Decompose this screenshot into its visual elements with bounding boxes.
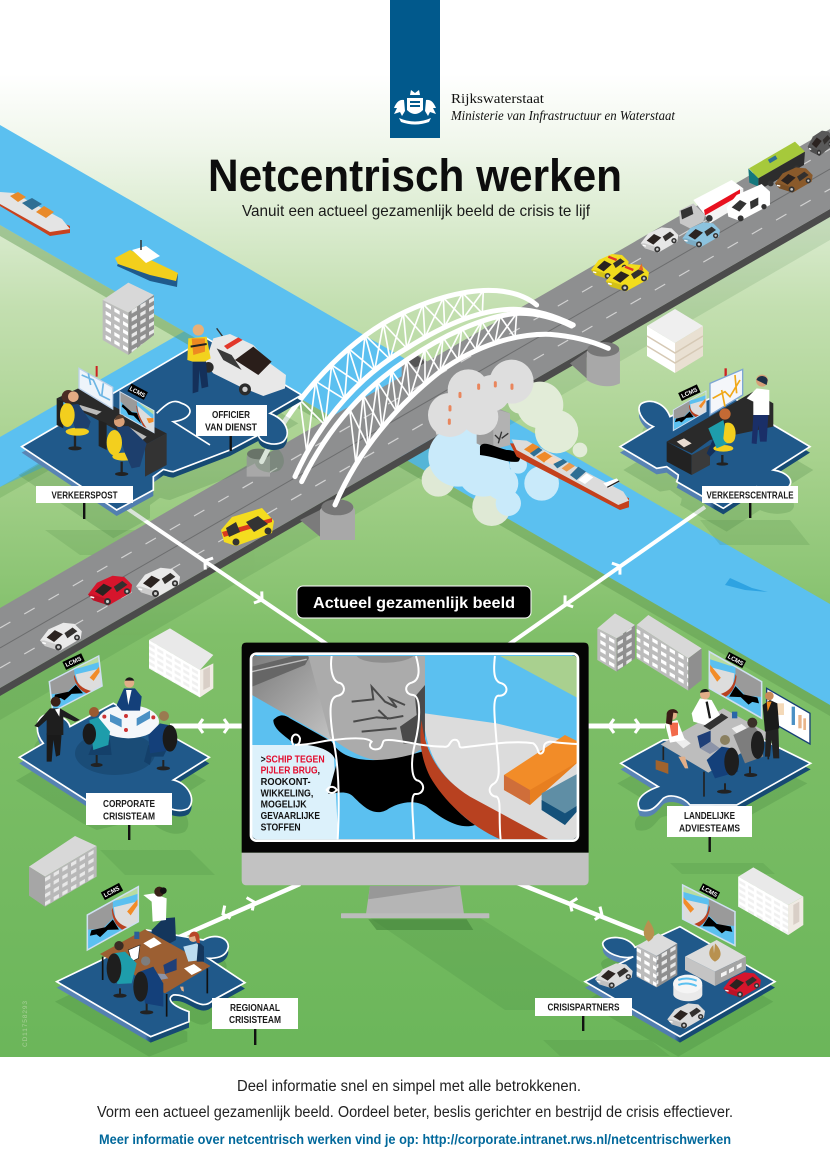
operator seated [707,408,736,466]
screen message text: ROOKONT- [261,777,311,788]
chin [242,853,589,885]
back bridge pier [402,354,430,380]
black frame [242,643,589,853]
label: officier van dienst: VAN DIENST [205,422,257,434]
smoke over road [428,360,534,437]
connector lines with arrows [125,507,705,938]
river [0,125,830,716]
red fire car [723,972,761,998]
label: verkeerspost [36,486,133,519]
screen message text: PIJLER BRUG, [261,766,320,777]
document code: CD11758293 [22,1001,29,1047]
panel: corporate crisisteam [16,628,213,834]
heading: actueel gezamenlijk beeld: Actueel gezamenlijk beeld [313,595,515,612]
label: officier van dienst: OFFICIER [212,410,251,421]
standing woman [143,887,176,945]
dark car [808,131,830,156]
LCMS monitor: LCMS [128,386,146,399]
wall screen: LCMS [65,656,83,669]
foam clouds on water [422,427,559,526]
title: Netcentrisch werken [208,150,622,201]
wall screen: LCMS [700,886,718,899]
yellow service car 2 [606,263,649,291]
wall screen [49,653,102,712]
screen image [250,653,580,843]
label: verkeerscentrale [702,486,798,518]
police car left [595,963,633,989]
building: white stacked right [647,309,703,373]
puzzle lines [292,656,578,840]
seated man front [707,735,739,794]
operator woman [60,390,91,450]
label: regionaal crisisteam [212,998,298,1045]
panel: crisispartners [583,867,803,1057]
screen message text: MOGELIJK [261,800,307,811]
screen message text: >SCHIP TEGEN [261,754,325,765]
standing man [34,697,80,762]
puzzle pieces [18,338,302,538]
footer: Meer informatie over netcentrisch werken vind je op: http://corporate.intranet.rws.nl/netcentrischwerken [99,1132,731,1147]
panel: landelijke adviesteams [597,613,811,831]
white van [727,184,770,221]
label: verkeerscentrale: VERKEERSCENTRALE [706,490,794,502]
puzzle piece [583,927,775,1057]
label: regionaal crisisteam: REGIONAAL [230,1003,280,1014]
gray tower [637,920,677,987]
label: crisispartners: CRISISPARTNERS [548,1002,620,1014]
map monitor [710,368,743,415]
police car [203,328,286,396]
woman left [665,709,688,768]
panel: verkeerscentrale [620,368,813,532]
bus [748,142,805,187]
wall screen [683,883,735,946]
tower building [597,613,635,672]
puzzle piece [620,392,813,532]
footer: Deel informatie snel en simpel met alle betrokkenen. [237,1078,581,1095]
wall screen: LCMS [103,886,121,899]
bridge piers [247,342,620,540]
ground shadows [0,217,830,1056]
label: landelijke adviesteams: ADVIESTEAMS [679,824,740,834]
meeting table [661,708,772,797]
footer: Vorm een actueel gezamenlijk beeld. Oordeel beter, beslis gerichter en bestrijd de crisis effectiever. [97,1104,733,1121]
puzzle piece [55,930,245,1057]
blue car [682,222,720,248]
cargo ship top left [0,192,70,236]
yellow service car 1 [591,254,629,279]
truck [679,180,743,228]
label: regionaal crisisteam: CRISISTEAM [229,1015,281,1026]
LCMS wall screen: LCMS [726,654,744,668]
screen message text: STOFFEN [261,822,301,833]
screen border [251,654,578,841]
gray building [29,836,97,907]
ship [510,439,629,510]
briefcase [656,760,668,774]
police car [136,568,180,597]
man seated [107,941,137,998]
building white [149,628,213,697]
officer [187,324,211,393]
label: officier van dienst [196,405,267,451]
chart wall panel [767,688,810,744]
long building [637,615,702,691]
logo text: Ministerie van Infrastructuur en Waterstaat [450,108,676,123]
logo text [450,92,676,123]
fire station [685,940,746,986]
white car [641,227,678,253]
label: verkeerspost: VERKEERSPOST [52,490,118,502]
desk [667,392,773,475]
icon: coat of arms [394,90,436,124]
woman seated left [83,707,112,767]
footer [0,1057,830,1174]
panel: verkeerspost and officier van dienst [18,324,302,538]
smoking pier [477,407,520,462]
water tank [673,975,702,1001]
front arch truss [350,313,517,464]
LCMS wall screen [709,652,762,718]
bridge arches [262,290,608,505]
wood table [100,929,211,1017]
ambulance [221,508,274,546]
building: top left tower [103,283,154,355]
logo text: Rijkswaterstaat [451,92,544,107]
white building [738,867,803,935]
shadow [368,919,473,930]
subtitle: Vanuit een actueel gezamenlijk beeld de crisis te lijf [242,203,591,220]
road [0,129,830,696]
yellow boat [115,240,178,287]
brown car [775,167,813,193]
heading: actueel gezamenlijk beeld [297,586,531,618]
back arch truss [300,291,483,452]
control desk [57,388,167,477]
white car [40,623,82,651]
light smoke [508,382,587,457]
man front seated [133,956,163,1014]
map monitor [79,366,113,409]
vehicles on the road right [591,131,830,291]
screen message text [261,754,325,833]
operator standing [747,375,769,444]
label: corporate crisisteam [86,793,172,840]
puzzle piece [617,740,811,831]
central monitor [242,643,589,930]
logo: Rijkswaterstaat [390,0,440,138]
red car [88,576,132,605]
label: landelijke adviesteams: LANDELIJKE [684,811,735,822]
woman right [180,932,204,992]
panel: regionaal crisisteam [29,836,245,1057]
man back [117,677,142,711]
burning bridge pier, smoke, ship [422,360,629,526]
LCMS monitor [120,383,154,433]
label: corporate crisisteam: CRISISTEAM [103,812,155,822]
police car front [667,1003,705,1029]
label: landelijke adviesteams [667,806,752,852]
puzzle piece [16,703,209,834]
man seated right [144,711,177,770]
screen message text: GEVAARLIJKE [261,811,320,822]
label: crisispartners [535,998,632,1031]
vehicles on the road left [40,508,274,651]
seated man right [733,718,764,777]
man back [692,689,720,725]
standing man right [763,692,779,758]
operator man [107,415,147,476]
wall screen [87,883,138,950]
round table [98,705,159,738]
stand [341,886,489,918]
screen message text: WIKKELING, [261,788,314,799]
LCMS monitor [673,384,706,431]
label: corporate crisisteam: CORPORATE [103,799,155,810]
LCMS monitor: LCMS [681,387,699,400]
